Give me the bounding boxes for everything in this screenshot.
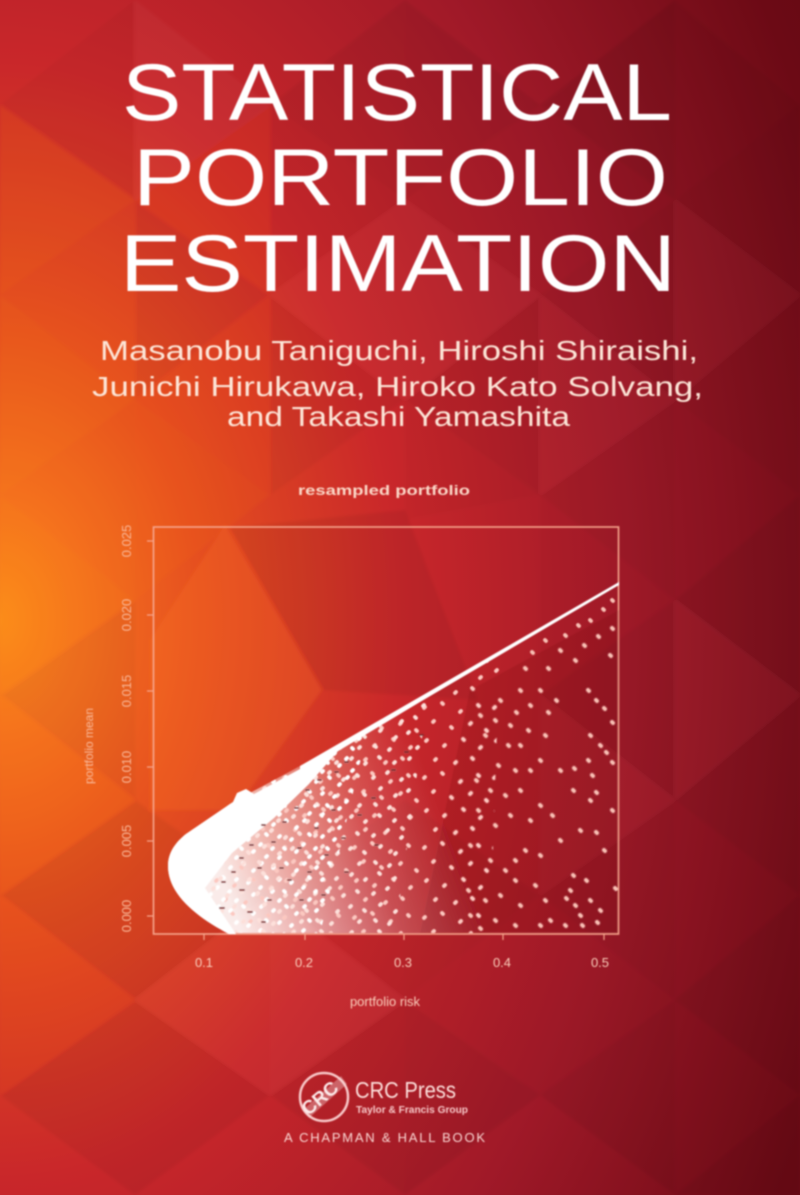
dark specks inside dense region — [220, 735, 423, 922]
x axis label: portfolio risk — [350, 994, 421, 1009]
authors: Junichi Hirukawa, Hiroko Kato Solvang, — [92, 371, 703, 402]
density glow — [168, 720, 477, 934]
y axis label: portfolio mean — [82, 708, 96, 784]
logo circle: CRC — [298, 1077, 343, 1120]
sparse scatter points — [468, 600, 616, 929]
scatter chart: resampled portfolio — [82, 482, 619, 1009]
y axis ticks and labels: 0.005 — [119, 825, 134, 857]
y axis ticks and labels — [119, 525, 153, 932]
y axis ticks and labels: 0.015 — [119, 675, 134, 707]
x axis ticks and labels: 0.3 — [394, 955, 412, 970]
y axis ticks and labels: 0.020 — [119, 599, 134, 631]
x axis ticks and labels: 0.5 — [591, 955, 609, 970]
x axis ticks and labels: 0.1 — [195, 955, 213, 970]
title — [120, 48, 676, 309]
authors: and Takashi Yamashita — [227, 401, 571, 432]
authors — [92, 335, 703, 432]
stipple band: middle — [273, 702, 427, 934]
y axis ticks and labels: 0.025 — [119, 525, 134, 557]
y axis ticks and labels: 0.000 — [119, 900, 134, 932]
x axis ticks and labels — [195, 934, 609, 970]
title: ESTIMATION — [120, 219, 676, 309]
solid frontier cloud — [168, 743, 345, 934]
dark wedge shading — [420, 610, 619, 933]
plot frame — [154, 527, 618, 934]
title: STATISTICAL — [122, 48, 672, 138]
x axis ticks and labels: 0.4 — [493, 955, 511, 970]
publisher group: Taylor & Francis Group — [356, 1105, 468, 1116]
publisher logo: CRC Press — [284, 1073, 485, 1145]
stipple band: inner — [209, 736, 363, 934]
scatter cloud — [168, 610, 619, 934]
imprint line: A CHAPMAN & HALL BOOK — [284, 1130, 485, 1145]
chart title: resampled portfolio — [298, 482, 470, 498]
frontier line — [300, 582, 619, 774]
stipple band: innermost — [214, 803, 318, 932]
publisher name: CRC Press — [355, 1077, 456, 1103]
y axis ticks and labels: 0.010 — [119, 751, 134, 783]
authors: Masanobu Taniguchi, Hiroshi Shiraishi, — [100, 335, 698, 366]
x axis ticks and labels: 0.2 — [295, 955, 313, 970]
title: PORTFOLIO — [133, 133, 668, 223]
stipple band: outer — [214, 661, 500, 934]
